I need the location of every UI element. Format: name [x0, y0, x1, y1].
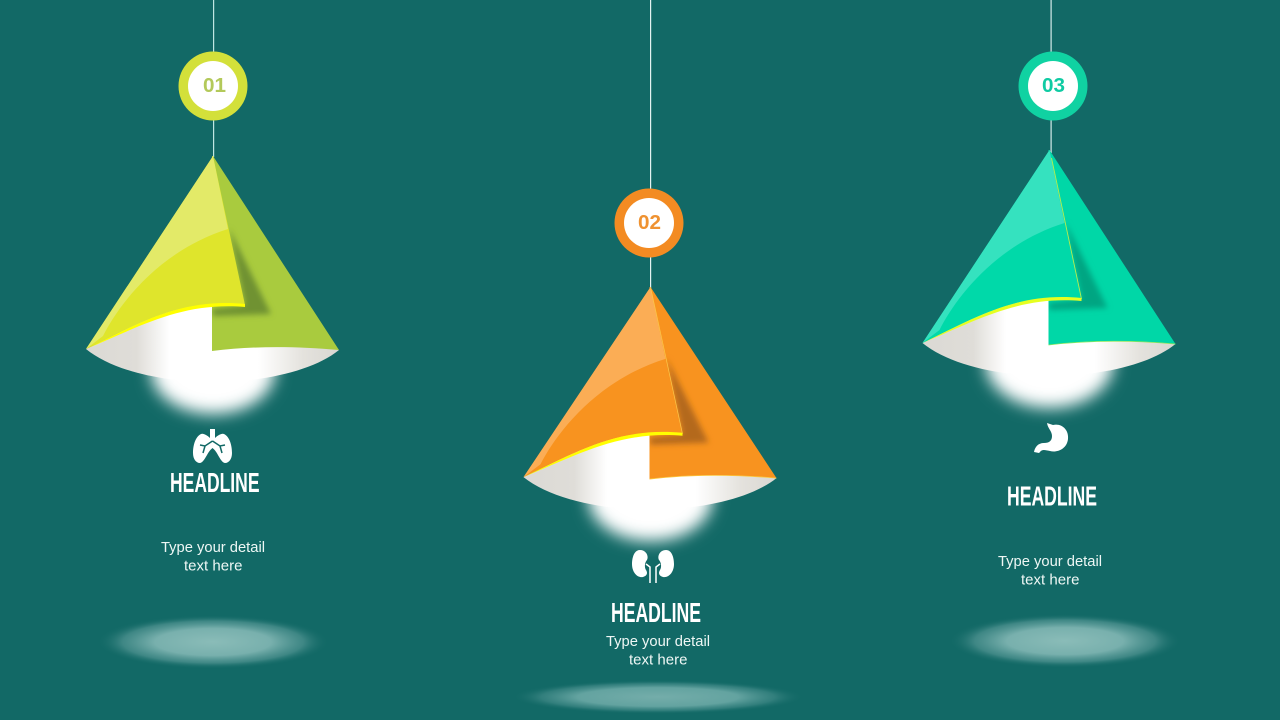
detail text 3: Type your detail	[998, 554, 1102, 570]
number badge 01	[178, 52, 248, 120]
number badge 03: 03	[1042, 74, 1065, 97]
column 1	[86, 0, 339, 669]
column 3	[922, 0, 1181, 668]
ground shadow 1	[97, 615, 329, 669]
detail text 1: Type your detail	[161, 540, 265, 556]
cone 1	[86, 156, 339, 414]
ground shadow 2	[512, 680, 804, 714]
hanging line 3	[1050, 0, 1052, 153]
detail text 2	[606, 634, 710, 668]
icon: stomach	[1034, 423, 1068, 453]
number badge 02: 02	[638, 211, 661, 234]
ground shadow 3	[949, 614, 1181, 668]
icon: kidneys	[632, 550, 674, 583]
detail text 1: text here	[184, 558, 242, 574]
headline 2: HEADLINE	[611, 597, 701, 628]
detail text 1	[161, 540, 265, 574]
detail text 3: text here	[1021, 572, 1080, 588]
number badge 01: 01	[203, 74, 226, 97]
icon: lungs	[193, 429, 232, 463]
hanging line 2	[650, 0, 651, 288]
headline 1: HEADLINE	[170, 467, 260, 498]
detail text 2: text here	[629, 652, 688, 668]
cone 3	[922, 150, 1176, 408]
column 2	[512, 0, 804, 714]
cone 2	[524, 287, 776, 541]
hanging line 1	[213, 0, 214, 157]
detail text 2: Type your detail	[606, 634, 710, 650]
headline 3: HEADLINE	[1007, 480, 1097, 512]
number badge 02	[614, 188, 684, 258]
number badge 03	[1018, 52, 1088, 120]
detail text 3	[998, 554, 1102, 588]
